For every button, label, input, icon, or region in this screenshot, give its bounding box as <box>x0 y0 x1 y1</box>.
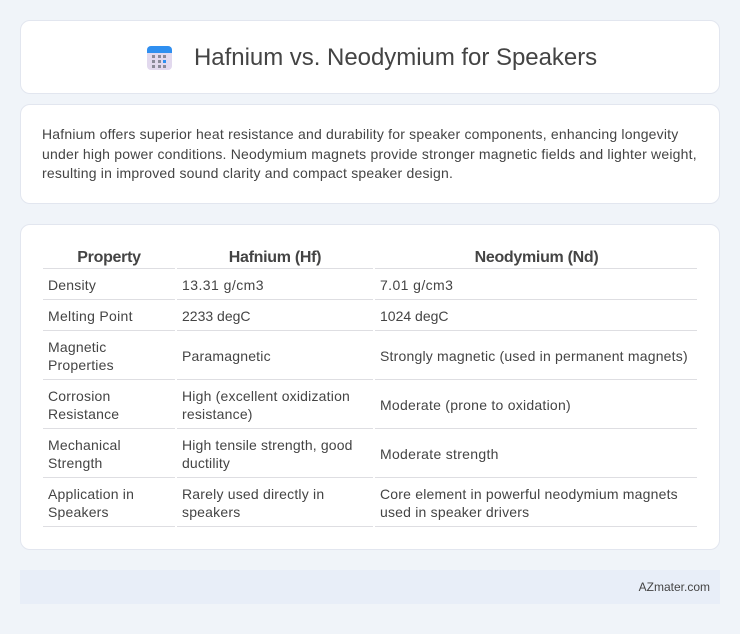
footer bar <box>20 570 720 604</box>
row: corrosion resistance: Corrosion <box>48 388 110 404</box>
title card <box>20 20 720 94</box>
row: melting point <box>48 308 449 324</box>
row: application in speakers: Application in <box>48 486 134 502</box>
row: application in speakers: Core element in powerful neodymium magnets <box>380 486 678 502</box>
row: melting point: 2233 degC <box>182 308 251 324</box>
icon: calendar <box>147 46 172 70</box>
row: melting point: 1024 degC <box>380 308 449 324</box>
summary text: under high power conditions. Neodymium magnets provide stronger magnetic fields and lighter weight, <box>42 146 697 162</box>
row: density <box>48 277 453 293</box>
row: application in speakers: speakers <box>182 504 240 520</box>
table header: Property <box>77 249 141 266</box>
title: Hafnium vs. Neodymium for Speakers <box>194 44 597 71</box>
row: application in speakers: used in speaker drivers <box>380 504 529 520</box>
row: magnetic properties: Magnetic <box>48 339 106 355</box>
row: mechanical strength: Moderate strength <box>380 446 499 462</box>
row: melting point: Melting Point <box>48 308 133 324</box>
row: mechanical strength: High tensile strength, good <box>182 437 353 453</box>
row: corrosion resistance: resistance) <box>182 406 253 422</box>
row: density: 7.01 g/cm3 <box>380 277 453 293</box>
row: application in speakers <box>48 486 678 520</box>
row: mechanical strength: Mechanical <box>48 437 121 453</box>
table header <box>77 249 598 266</box>
comparison table panel <box>20 224 720 550</box>
row: density: 13.31 g/cm3 <box>182 277 264 293</box>
row: corrosion resistance: Moderate (prone to oxidation) <box>380 397 571 413</box>
row: magnetic properties: Strongly magnetic (used in permanent magnets) <box>380 348 688 364</box>
summary panel <box>20 104 720 204</box>
row: corrosion resistance: High (excellent oxidization <box>182 388 350 404</box>
row: application in speakers: Rarely used directly in <box>182 486 324 502</box>
row: corrosion resistance <box>48 388 571 422</box>
row: mechanical strength: ductility <box>182 455 230 471</box>
table header: Neodymium (Nd) <box>475 249 598 266</box>
summary text: resulting in improved sound clarity and compact speaker design. <box>42 165 453 181</box>
footer credit: AZmater.com <box>639 580 710 594</box>
row: application in speakers: Speakers <box>48 504 109 520</box>
row: density: Density <box>48 277 96 293</box>
row: mechanical strength <box>48 437 499 471</box>
row: corrosion resistance: Resistance <box>48 406 119 422</box>
row: magnetic properties: Paramagnetic <box>182 348 271 364</box>
summary text <box>42 126 697 181</box>
summary text: Hafnium offers superior heat resistance and durability for speaker components, enhancing longevity <box>42 126 678 142</box>
row: magnetic properties: Properties <box>48 357 114 373</box>
row: mechanical strength: Strength <box>48 455 103 471</box>
table header: Hafnium (Hf) <box>229 249 321 266</box>
row: magnetic properties <box>48 339 688 373</box>
